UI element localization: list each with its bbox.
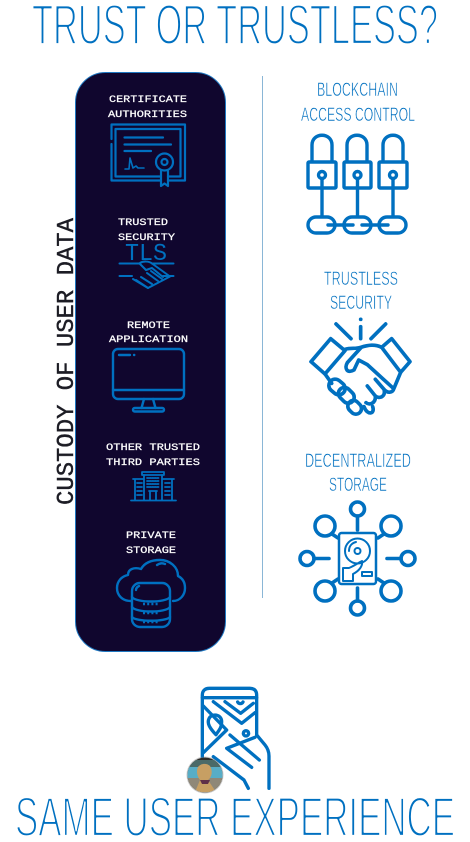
divider (262, 76, 264, 598)
label: private: PRIVATE (126, 530, 176, 542)
icon: phone map in hand (202, 688, 269, 788)
icon: cloud database (117, 560, 185, 627)
icon: certificate (112, 124, 185, 186)
label: storage: STORAGE (126, 545, 176, 557)
heading: trustless security: TRUSTLESS (324, 268, 398, 290)
photo: round avatar with dog (186, 756, 224, 794)
icon: monitor (113, 349, 184, 412)
heading: blockchain access control: BLOCKCHAIN (317, 79, 398, 101)
label: certificate: CERTIFICATE (109, 94, 187, 106)
label: application: APPLICATION (109, 334, 188, 346)
label: trusted: TRUSTED (118, 217, 168, 229)
heading: decentralized storage: STORAGE (329, 474, 387, 496)
label: other trusted: OTHER TRUSTED (106, 442, 200, 454)
label: third parties: THIRD PARTIES (106, 457, 200, 469)
heading: decentralized storage: DECENTRALIZED (305, 450, 411, 472)
icon: handshake (311, 319, 410, 417)
icon: TLS handshake (120, 241, 174, 288)
label: security: SECURITY (118, 232, 176, 244)
label: remote: REMOTE (127, 320, 170, 332)
heading: blockchain access control (301, 79, 415, 126)
icon: building (131, 472, 176, 500)
label: authorities: AUTHORITIES (108, 109, 187, 121)
vertical label: custody of user data: CUSTODY OF USER DATA (54, 217, 81, 505)
heading: trustless security (324, 268, 398, 314)
icon: TLS handshake: TLS (125, 241, 167, 268)
panel: custody of user data (76, 72, 226, 652)
icon: decentralized hard drive (300, 502, 415, 615)
heading: trustless security: SECURITY (330, 292, 392, 314)
heading: decentralized storage (305, 450, 411, 496)
icon: chained padlocks (308, 135, 407, 233)
